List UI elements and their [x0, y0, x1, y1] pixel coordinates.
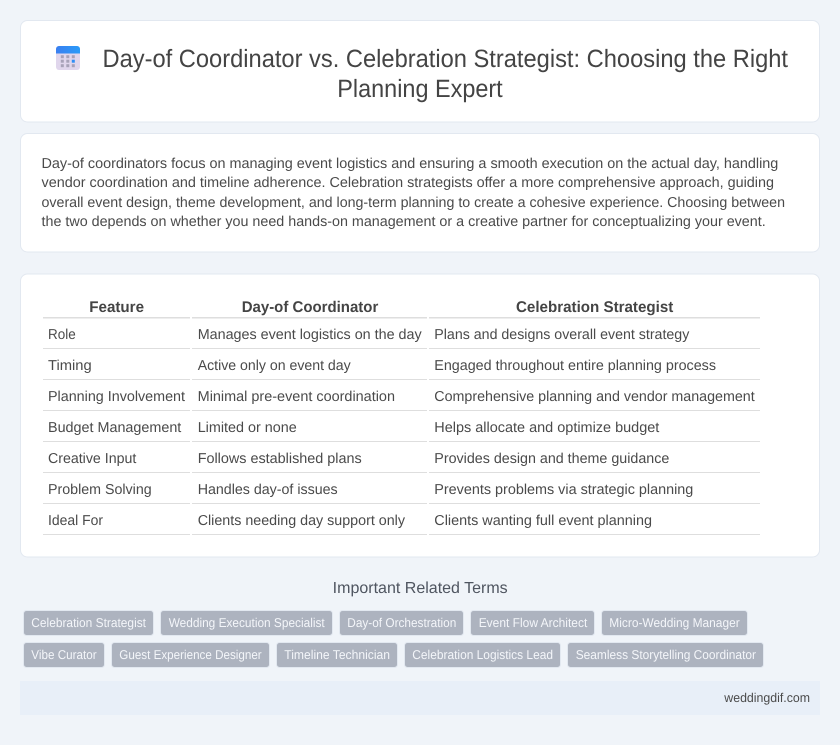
title: [102, 45, 788, 103]
tag: [160, 610, 332, 636]
tag: [470, 610, 594, 636]
table header row: Celebration Strategist: [516, 299, 673, 316]
tag: Seamless Storytelling Coordinator: [576, 647, 757, 662]
row: timing: Timing: [48, 358, 92, 374]
row: timing: [48, 358, 716, 374]
tag: Timeline Technician: [284, 647, 390, 662]
row: timing: Engaged throughout entire planning process: [434, 358, 716, 374]
tag: Celebration Logistics Lead: [412, 647, 553, 662]
tag: [340, 610, 464, 636]
tag: Day-of Orchestration: [347, 615, 456, 630]
tag: [404, 642, 560, 668]
table header row: [89, 299, 673, 316]
heading: important related terms: Important Related Terms: [333, 580, 508, 597]
row: role: [48, 327, 690, 343]
row: problem solving: [48, 482, 693, 498]
row: budget management: Budget Management: [48, 420, 181, 436]
title: Planning Expert: [337, 75, 503, 103]
row: planning involvement: [48, 389, 755, 405]
icon: calendar: [56, 46, 80, 70]
row: role: Plans and designs overall event strategy: [434, 327, 690, 343]
tag: [24, 610, 154, 636]
row: creative input: Creative Input: [48, 451, 136, 467]
row: problem solving: Problem Solving: [48, 482, 152, 498]
row: problem solving: Prevents problems via strategic planning: [434, 482, 693, 498]
tag: Event Flow Architect: [479, 615, 588, 630]
tag: [24, 642, 104, 668]
title: Day-of Coordinator vs. Celebration Strategist: Choosing the Right: [102, 45, 788, 73]
tag: [602, 610, 748, 636]
row: role: Role: [48, 327, 76, 343]
tag: Guest Experience Designer: [119, 647, 262, 662]
row: budget management: Limited or none: [198, 420, 297, 436]
table header row: Day-of Coordinator: [242, 299, 378, 316]
row: ideal for: Ideal For: [48, 513, 103, 529]
panel: comparison table: [20, 274, 820, 557]
row: budget management: Helps allocate and optimize budget: [434, 420, 659, 436]
tags: related terms: [24, 610, 764, 668]
row: ideal for: Clients wanting full event planning: [434, 513, 652, 529]
footer: weddingdif.com: [723, 690, 810, 705]
tag: [276, 642, 398, 668]
row: planning involvement: Planning Involvement: [48, 389, 185, 405]
table header row: Feature: [89, 299, 144, 316]
text block: introduction: Day-of coordinators focus on managing event logistics and ensuring a smooth execution on the actual day, handling: [42, 156, 778, 172]
row: role: Manages event logistics on the day: [198, 327, 422, 343]
row: timing: Active only on event day: [198, 358, 351, 374]
row: creative input: Follows established plans: [198, 451, 362, 467]
row: planning involvement: Comprehensive planning and vendor management: [434, 389, 755, 405]
text block: introduction: the two depends on whether you need hands-on management or a creative partner for conceptualizing your event.: [42, 214, 766, 230]
row: creative input: [48, 451, 669, 467]
row: ideal for: [48, 513, 652, 529]
text block: introduction: vendor coordination and timeline adherence. Celebration strategists offer a more comprehensive approach, guiding: [42, 175, 774, 191]
tag: Vibe Curator: [31, 647, 97, 662]
row: creative input: Provides design and theme guidance: [434, 451, 669, 467]
row: planning involvement: Minimal pre-event coordination: [198, 389, 395, 405]
tag: Celebration Strategist: [31, 615, 146, 630]
text block: introduction: overall event design, theme development, and long-term planning to create a cohesive experience. Choosing between: [42, 195, 785, 211]
row: budget management: [48, 420, 659, 436]
text block: introduction: [42, 156, 785, 230]
tag: Wedding Execution Specialist: [169, 615, 325, 630]
tag: [568, 642, 764, 668]
panel: header: [20, 20, 820, 122]
tag: [112, 642, 270, 668]
tag: Micro-Wedding Manager: [609, 615, 740, 630]
row: ideal for: Clients needing day support only: [198, 513, 406, 529]
row: problem solving: Handles day-of issues: [198, 482, 338, 498]
panel: description: [20, 134, 820, 252]
footer: [20, 681, 820, 715]
